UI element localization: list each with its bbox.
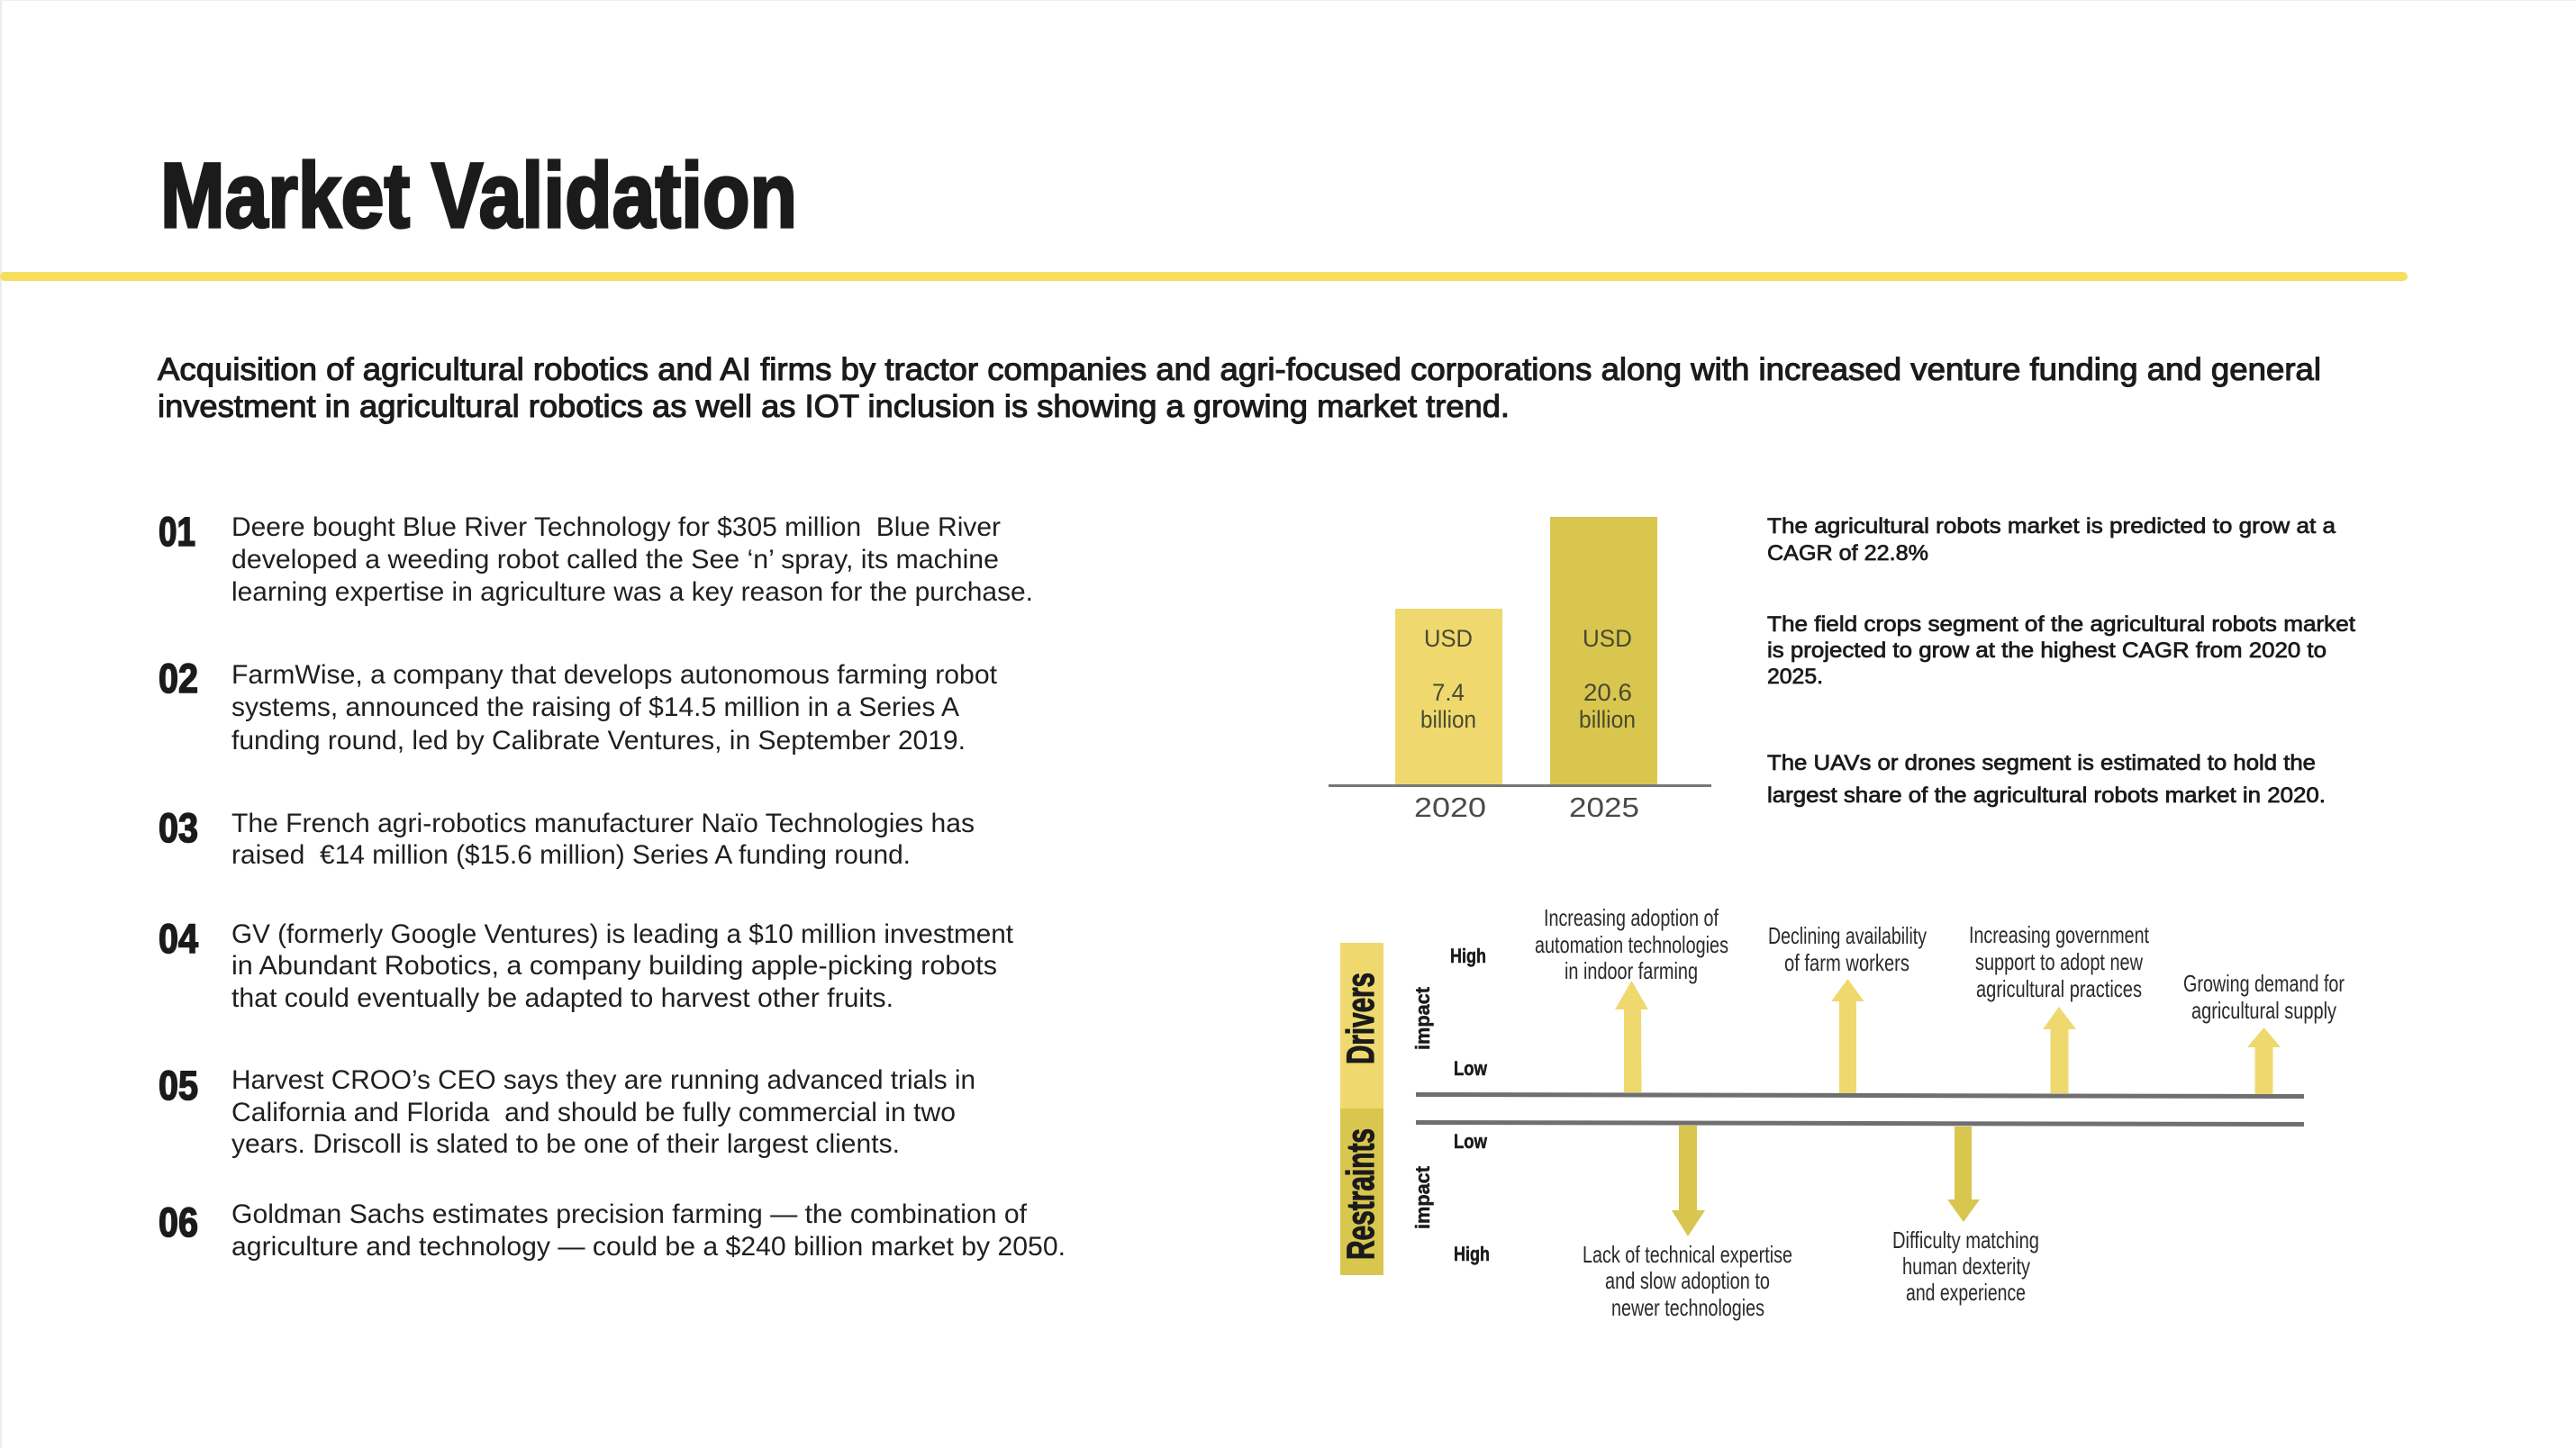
item 04: GV (formerly Google Ventures) is leading a $10 million investment [231,919,1013,949]
drivers impact scale: impact [1411,986,1434,1050]
item 02: FarmWise, a company that develops autonomous farming robot [231,660,997,690]
item 01: 01 [159,509,195,555]
intro statement [158,352,2321,424]
driver arrow 3: support to adopt new [1975,948,2143,975]
item 01: developed a weeding robot called the See ‘n’ spray, its machine [231,545,999,575]
note: field crops: The field crops segment of the agricultural robots market [1767,612,2355,637]
item 05: years. Driscoll is slated to be one of their largest clients. [231,1129,900,1159]
axis label 2025: 2025 [1569,792,1639,823]
restraint arrow 1 [1583,1126,1792,1321]
item 03: The French agri-robotics manufacturer Naïo Technologies has [231,809,975,838]
driver arrow 4: Growing demand for [2183,970,2345,997]
driver arrow 3 [1969,921,2150,1093]
yellow header rule [0,272,2408,281]
bar 2025: USD [1583,625,1632,652]
item 02: 02 [159,656,198,701]
item 05: 05 [159,1063,198,1109]
bar 2025 [1550,517,1657,785]
restraint arrow 2 [1892,1127,2039,1306]
item 06: 06 [159,1199,198,1245]
item 04: in Abundant Robotics, a company building apple-picking robots [231,951,997,981]
list of market events [159,509,1066,1262]
drivers impact scale [1411,945,1488,1080]
driver arrow 2: of farm workers [1784,949,1909,976]
intro statement: Acquisition of agricultural robotics and AI firms by tractor companies and agri-focused corporations along with increased venture funding and general [158,352,2321,387]
restraint arrow 1: Lack of technical expertise [1583,1241,1792,1268]
driver arrow 1: Increasing adoption of [1544,904,1719,931]
note: field crops [1767,612,2355,689]
note: field crops: 2025. [1767,665,1823,689]
chart axis [1329,784,1711,787]
item 05 [159,1063,975,1159]
item 04 [159,916,1013,1013]
driver arrow 1: automation technologies [1535,931,1728,958]
axis label 2020: 2020 [1414,792,1486,823]
driver arrow 1: in indoor farming [1565,957,1698,984]
side band: restraints: Restraints [1339,1128,1383,1260]
bar 2020: billion [1420,706,1476,733]
restraint arrow 2: human dexterity [1902,1253,2030,1280]
note: CAGR: The agricultural robots market is predicted to grow at a [1767,514,2336,538]
item 03 [159,805,975,870]
bar chart: market size [1329,517,1711,823]
driver arrow 3: Increasing government [1969,921,2150,948]
note: UAVs [1767,751,2326,808]
driver arrow 4: agricultural supply [2191,997,2336,1024]
item 05: Harvest CROO’s CEO says they are running advanced trials in [231,1065,975,1095]
title: Market Validation [160,144,797,247]
restraint arrow 2: and experience [1906,1279,2026,1306]
restraints impact scale: High [1454,1243,1490,1265]
item 03: 03 [159,805,198,851]
note: CAGR: CAGR of 22.8% [1767,541,1928,566]
drivers impact scale: High [1450,945,1486,967]
item 01: learning expertise in agriculture was a key reason for the purchase. [231,577,1033,607]
bar 2025: 20.6 [1583,679,1632,706]
drivers impact scale: Low [1454,1057,1488,1080]
note: UAVs: largest share of the agricultural robots market in 2020. [1767,783,2326,808]
driver arrow 1 [1535,904,1728,1092]
item 04: that could eventually be adapted to harvest other fruits. [231,983,893,1013]
bar 2020: USD [1424,625,1473,652]
driver arrow 3: agricultural practices [1976,975,2142,1002]
bar 2020: 7.4 [1432,679,1465,706]
driver arrow 2: Declining availability [1768,922,1927,949]
drivers and restraints diagram [1339,904,2345,1321]
side band: drivers [1339,943,1383,1109]
note: field crops: is projected to grow at the highest CAGR from 2020 to [1767,638,2327,663]
restraints impact scale [1411,1130,1490,1265]
note: CAGR [1767,514,2336,566]
drivers baseline [1416,1092,2304,1099]
item 06: Goldman Sachs estimates precision farming — the combination of [231,1199,1028,1229]
item 06 [159,1199,1066,1262]
restraint arrow 1: newer technologies [1611,1294,1764,1321]
item 02 [159,656,997,756]
driver arrow 4 [2183,970,2345,1094]
item 02: systems, announced the raising of $14.5 million in a Series A [231,692,959,722]
market growth notes [1767,514,2355,808]
restraints impact scale: Low [1454,1130,1488,1153]
item 03: raised €14 million ($15.6 million) Series A funding round. [231,840,911,870]
item 04: 04 [159,916,198,962]
restraint arrow 2: Difficulty matching [1892,1226,2039,1253]
item 01: Deere bought Blue River Technology for $305 million Blue River [231,512,1001,542]
bar 2020 [1395,609,1502,785]
side band: drivers: Drivers [1339,973,1383,1064]
restraints impact scale: impact [1411,1165,1434,1229]
note: UAVs: The UAVs or drones segment is estimated to hold the [1767,751,2316,775]
item 06: agriculture and technology — could be a $240 billion market by 2050. [231,1232,1066,1262]
restraints baseline [1416,1120,2304,1127]
bar 2025: billion [1579,706,1636,733]
item 05: California and Florida and should be fully commercial in two [231,1098,956,1127]
intro statement: investment in agricultural robotics as well as IOT inclusion is showing a growing market trend. [158,389,1510,424]
driver arrow 2 [1768,922,1927,1093]
restraint arrow 1: and slow adoption to [1605,1267,1770,1294]
item 01 [159,509,1033,607]
item 02: funding round, led by Calibrate Ventures, in September 2019. [231,726,966,756]
